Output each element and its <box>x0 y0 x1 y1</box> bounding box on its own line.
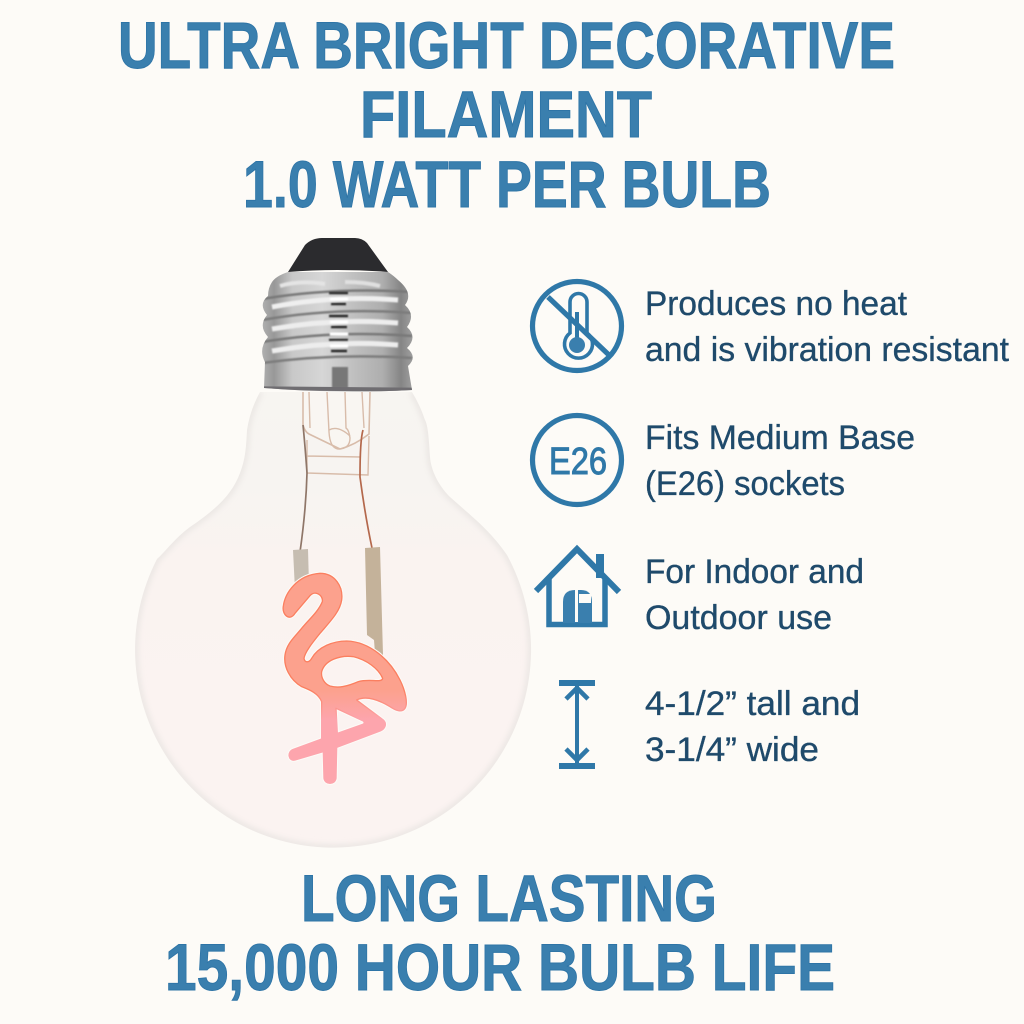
text: no heat <box>645 285 1010 369</box>
glass globe <box>135 392 531 848</box>
title: FILAMENT <box>360 77 652 151</box>
title <box>118 8 895 221</box>
text: dimensions: 3-1/4” wide <box>645 731 819 769</box>
title: ULTRA BRIGHT DECORATIVE <box>118 8 895 82</box>
text: indoor outdoor: For Indoor and <box>645 553 864 591</box>
filament supports <box>293 547 383 655</box>
feature: no heat <box>532 282 1010 370</box>
black cap <box>288 238 388 272</box>
text: dimensions: 4-1/2” tall and <box>645 685 860 723</box>
text: E26 sockets: Fits Medium Base <box>645 419 915 457</box>
feature: indoor and outdoor <box>536 549 864 637</box>
icon: E26 badge <box>532 416 622 504</box>
text: no heat: and is vibration resistant <box>645 331 1010 369</box>
bottom heading <box>165 861 835 1004</box>
bottom heading: 15,000 HOUR BULB LIFE <box>165 930 835 1004</box>
icon: crossed-out thermometer <box>532 282 622 370</box>
text: indoor outdoor: Outdoor use <box>645 599 832 637</box>
icon: house <box>536 549 619 624</box>
text: dimensions <box>645 685 860 769</box>
flamingo filament <box>283 573 406 783</box>
icon: height arrow <box>559 683 595 766</box>
feature: E26 base <box>532 416 915 504</box>
text: E26 sockets <box>645 419 915 503</box>
illustration: flamingo filament bulb <box>135 238 531 848</box>
title: 1.0 WATT PER BULB <box>243 147 771 221</box>
screw center reflections <box>329 293 348 351</box>
text: E26 sockets: (E26) sockets <box>645 465 845 503</box>
screw base <box>262 272 413 392</box>
bottom heading: LONG LASTING <box>301 861 717 935</box>
text: indoor outdoor <box>645 553 864 637</box>
feature: dimensions <box>559 683 860 769</box>
text: no heat: Produces no heat <box>645 285 908 323</box>
glass stem <box>303 392 370 475</box>
lead wires <box>300 425 372 552</box>
icon: E26 badge: E26 <box>549 441 607 483</box>
